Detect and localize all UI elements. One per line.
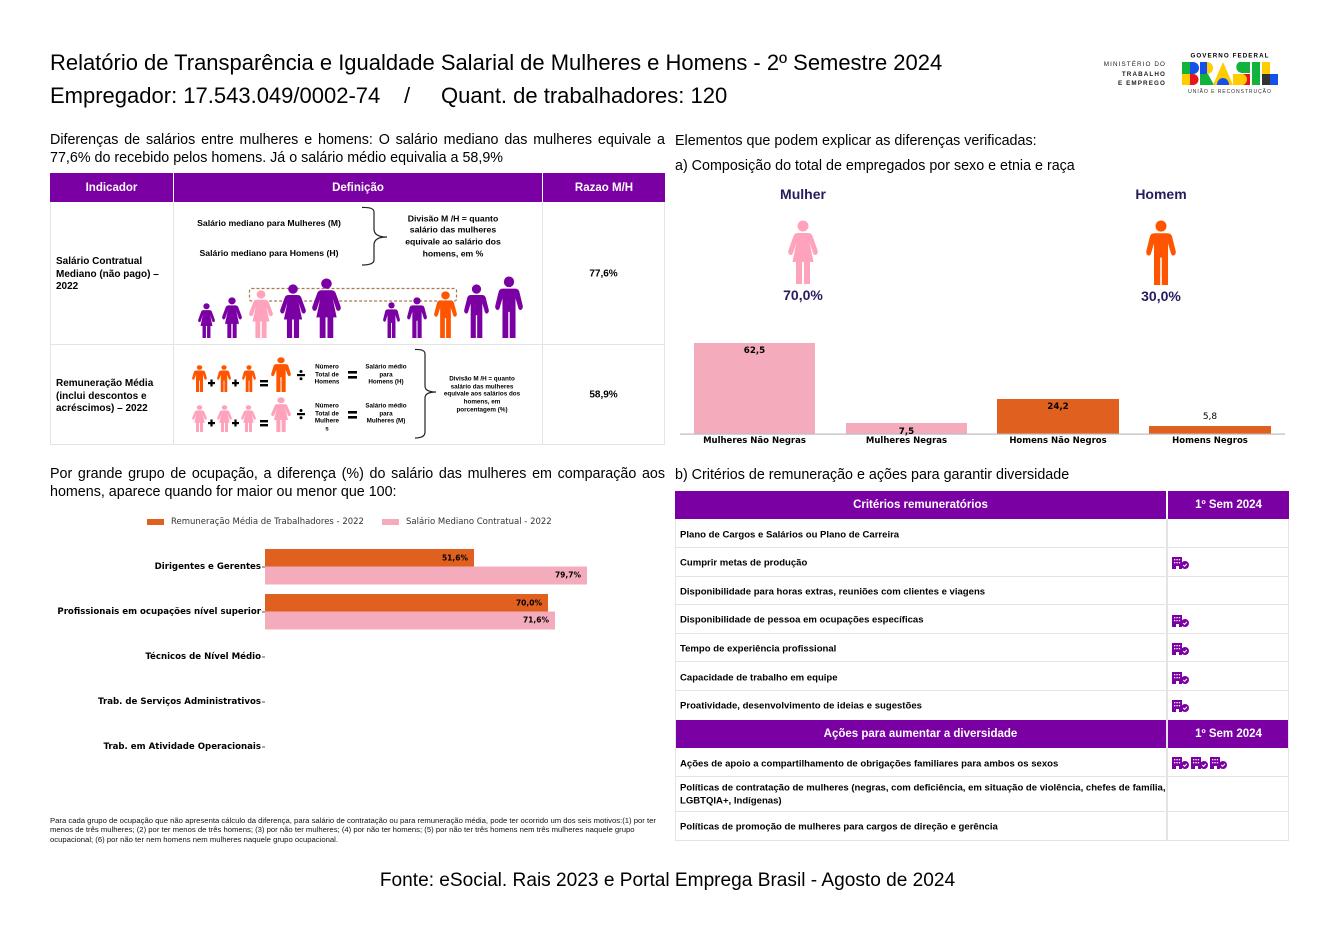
heading: critérios: b) Critérios de remuneração e ações para garantir diversidade [675,467,1069,483]
value: 5,8: 5,8 [1203,412,1217,422]
category: dirigentes: Dirigentes e Gerentes [155,562,261,572]
table header: 1º sem 2024 ações [1168,720,1289,748]
label: salário médio mulheres: Mulheres (M) [367,418,405,425]
logo: ministério do trabalho e emprego: TRABALHO [1122,71,1166,78]
axis label: homens não negros: Homens Não Negros [1009,436,1107,446]
employer line [50,83,727,108]
table header: definição [174,173,542,202]
intro text: occupation groups: Por grande grupo de ocupação, a diferença (%) do salário das mulheres em comparação aos homens, aparece quando for maior ou menor que 100: [50,466,665,500]
row label: remuneração média: Remuneração Média (inclui descontos e acréscimos) – 2022 [56,378,153,414]
panel: man share [1135,186,1187,304]
label: divisão média: porcentagem (%) [456,407,508,414]
table header: ações [675,720,1166,748]
label: salário médio mulheres: Salário médio [365,402,407,409]
label: número total de mulheres: Total de [315,410,339,417]
legend: Salário Mediano Contratual - 2022 [406,517,552,527]
row: ocupações específicas: Disponibilidade de pessoa em ocupações específicas [680,614,924,626]
label: divisão: equivale ao salário dos [405,236,501,246]
table header: 1º sem 2024 [1168,491,1289,519]
panel: indicator table [50,173,665,445]
value: 71,6%: 71,6% [523,616,549,624]
label: salário médio homens: Homens (H) [368,379,404,386]
label: número total de mulheres: Mulhere [315,418,339,425]
title: Relatório de Transparência e Igualdade Salarial de Mulheres e Homens - 2º Semestre 2024 [50,50,942,75]
label: salário médio mulheres: para [379,410,393,417]
icon: woman [788,220,818,284]
value: 30,0%: 30,0% [1141,288,1181,304]
diagram: average pay [192,348,520,439]
label: mulher: Mulher [780,186,826,202]
heading: elementos: Elementos que podem explicar as diferenças verificadas: [675,133,1037,149]
legend: Remuneração Média de Trabalhadores - 2022 [171,517,364,527]
table header: razão: Razao M/H [575,182,633,194]
label: divisão média: homens, em [464,399,500,406]
employer line: Empregador: 17.543.049/0002-74 [50,83,380,108]
value: 79,7%: 79,7% [555,570,581,580]
table header: 1º sem 2024: 1º Sem 2024 [1195,499,1262,511]
category: atividade operacionais: Trab. em Atividade Operacionais [103,742,261,752]
logo: ministério do trabalho e emprego: MINISTÉRIO DO [1104,61,1166,68]
row: contratação de mulheres [680,782,1165,806]
row: promoção de mulheres: Políticas de promoção de mulheres para cargos de direção e gerência [680,822,998,832]
bars [262,549,587,748]
label: salário médio mulheres [365,402,407,425]
table header: critérios remuneratórios [675,491,1166,519]
value: 70,0%: 70,0% [516,598,542,607]
employer line: / [404,83,410,108]
row: contratação de mulheres: Políticas de contratação de mulheres (negras, com deficiência, em situação de violência, chefes de família, [680,782,1165,794]
row: trabalho em equipe: Capacidade de trabalho em equipe [680,672,838,683]
table header: indicador [50,173,173,202]
label: mediano mulheres: Salário mediano para Mulheres (M) [197,218,341,228]
footnote: Para cada grupo de ocupação que não apresenta cálculo da diferença, para salário de contratação ou para remuneração média, pode ter ocorrido um dos seis motivos:(1) por ter [50,816,656,824]
row: tempo de experiência: Tempo de experiência profissional [680,644,836,654]
source line: Fonte: eSocial. Rais 2023 e Portal Emprega Brasil - Agosto de 2024 [380,870,955,891]
label: número total de mulheres: Número [315,403,339,410]
table header: ações: Ações para aumentar a diversidade [824,728,1017,740]
table header: indicador: Indicador [86,182,137,194]
row: plano de cargos: Plano de Cargos e Salários ou Plano de Carreira [680,529,899,540]
label: divisão média: Divisão M /H = quanto [449,376,515,383]
value: 62,5: 62,5 [744,346,765,356]
label: número total de mulheres: s [325,426,329,433]
bar chart: composition [680,343,1285,446]
label: homem: Homem [1135,186,1187,202]
value: 51,6%: 51,6% [442,553,468,562]
heading: composição: a) Composição do total de empregados por sexo e etnia e raça [675,158,1075,174]
category: técnicos: Técnicos de Nível Médio [145,652,261,662]
label: divisão: salário das mulheres [410,225,496,235]
axis label: mulheres negras: Mulheres Negras [866,436,947,446]
label: número total de mulheres [315,403,339,433]
people figures and brace [198,206,523,338]
logo: governo federal brasil: UNIÃO E RECONSTRUÇÃO [1188,88,1272,94]
employer line: Quant. de trabalhadores: 120 [441,83,727,108]
diagram: median salary [197,206,523,338]
label: divisão média: equivale aos salários dos [444,391,520,398]
bar chart: occupation differences [57,516,587,752]
value: 7,5: 7,5 [899,426,914,436]
axis label: homens negros: Homens Negros [1172,436,1248,446]
footnote [50,816,656,844]
row: metas de produção: Cumprir metas de produção [680,558,807,568]
label: divisão: homens, em % [423,248,483,258]
label: número total de homens: Número [315,363,339,370]
bars [680,343,1285,435]
category: profissionais: Profissionais em ocupações nível superior [57,607,261,617]
logo: ministério do trabalho e emprego: E EMPREGO [1118,80,1166,87]
label: salário médio homens: para [379,371,393,378]
panel: woman share [780,186,826,302]
table header: razão [543,173,665,202]
logo: ministério do trabalho e emprego [1104,60,1166,87]
row value: 58,9%: 58,9% [589,390,618,400]
category: serviços administrativos: Trab. de Serviços Administrativos [98,697,261,707]
table header: definição: Definição [332,182,384,194]
value: 70,0%: 70,0% [783,286,823,302]
row: obrigações familiares: Ações de apoio a compartilhamento de obrigações familiares para ambos os sexos [680,758,1058,769]
table header: 1º sem 2024 ações: 1º Sem 2024 [1195,728,1262,740]
footnote: ocupacional; (6) por não ter nem homens nem mulheres naquele grupo ocupacional. [50,835,338,844]
footnote: menos de três mulheres; (2) por ter menos de três homens; (3) por não ter mulheres; (4) por não ter homens; (5) por não ter três homens nem três mulheres naquele grupo [50,825,635,834]
icon: man [1146,220,1176,285]
label: número total de homens: Homens [315,379,339,386]
row: proatividade: Proatividade, desenvolvimento de ideias e sugestões [680,700,922,712]
row: horas extras: Disponibilidade para horas extras, reuniões com clientes e viagens [680,586,985,597]
label: número total de homens: Total de [315,371,339,378]
axis label: mulheres não negras: Mulheres Não Negras [703,436,806,446]
label: divisão [405,213,501,258]
row label: salário contratual: Salário Contratual Mediano (não pago) – 2022 [56,256,159,292]
label: divisão média: salário das mulheres [451,383,513,390]
row: contratação de mulheres: LGBTQIA+, Indígenas) [680,795,782,806]
intro text: salary differences: Diferenças de salários entre mulheres e homens: O salário mediano das mulheres equivale a 77,6% do recebido pelos homens. Já o salário médio equivalia a 58,9% [50,132,665,166]
label: número total de homens [315,363,340,386]
table header: critérios remuneratórios: Critérios remuneratórios [853,499,988,511]
logo: governo federal brasil [1182,52,1278,94]
logo: governo federal brasil: GOVERNO FEDERAL [1190,52,1270,59]
value: 24,2: 24,2 [1047,402,1069,412]
label: salário médio homens [365,363,407,386]
figures: men and women sums [192,348,436,439]
row value: 77,6%: 77,6% [589,268,618,279]
label: salário médio homens: Salário médio [365,363,407,370]
label: divisão: Divisão M /H = quanto [408,213,498,223]
legend [147,516,552,527]
label: mediano homens: Salário mediano para Homens (H) [199,248,339,258]
label: divisão média [444,376,520,414]
